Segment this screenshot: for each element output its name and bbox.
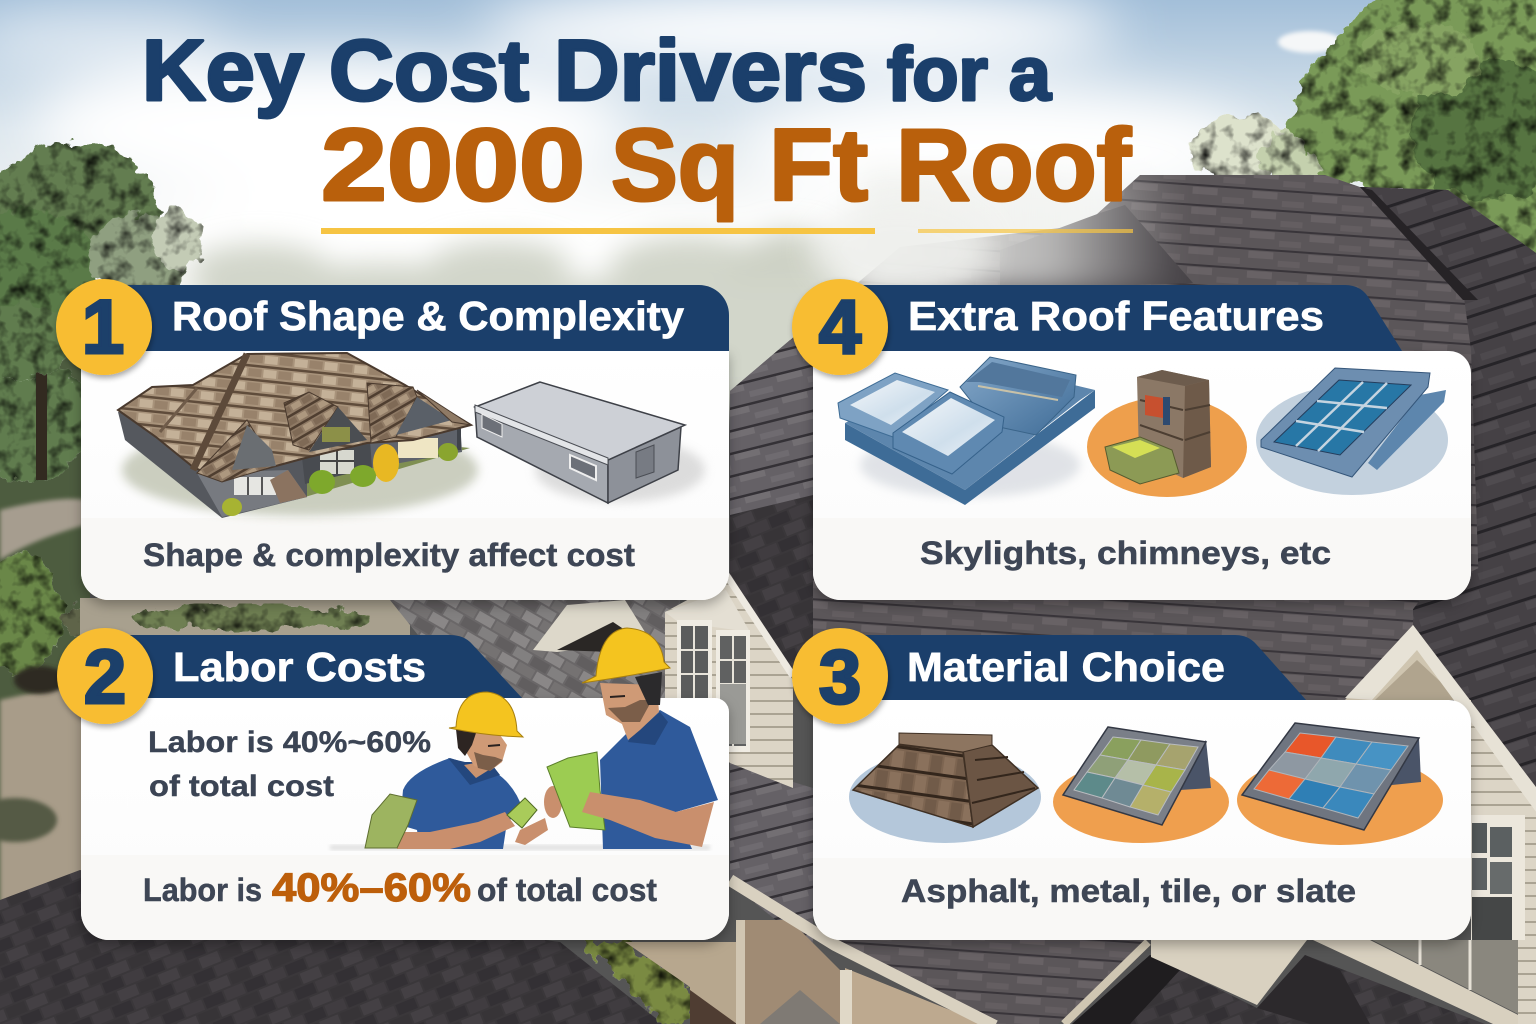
caption xyxy=(143,866,657,910)
caption: Labor is xyxy=(143,872,262,908)
heading: Labor Costs xyxy=(173,644,426,690)
right gable xyxy=(1345,625,1536,960)
header bar xyxy=(840,285,1402,351)
title line 2: Ft xyxy=(769,108,868,222)
shrubs by the wall xyxy=(579,942,690,1024)
background: sky and clouds xyxy=(0,0,1536,330)
caption: Shape & complexity affect cost xyxy=(143,537,635,573)
panel 4: extra roof features xyxy=(792,279,1471,600)
number badge 2 xyxy=(57,628,153,724)
lower walls xyxy=(625,942,745,1024)
card body xyxy=(81,350,729,600)
panel 2: labor costs xyxy=(57,628,729,940)
illustration: skylights xyxy=(838,357,1095,505)
worker left xyxy=(365,692,548,849)
number badge 3: 3 xyxy=(819,635,861,720)
background: garden on the left xyxy=(0,300,410,905)
number badge 4: 4 xyxy=(819,285,861,370)
title line 2: 2000 xyxy=(321,108,585,222)
background: house walls, gables and windows xyxy=(0,573,1536,1024)
title xyxy=(142,23,1133,234)
title line 2: Sq xyxy=(611,108,739,222)
title line 1: Cost xyxy=(329,23,529,119)
heading: Roof Shape & Complexity xyxy=(172,293,684,339)
middle siding and trim xyxy=(665,577,793,788)
header bar xyxy=(104,285,729,351)
illustration: simple flat-roof building xyxy=(475,382,705,503)
title line 1: Key xyxy=(142,23,304,119)
body text xyxy=(148,726,431,803)
illustration: tile xyxy=(1237,723,1443,845)
illustration: two workers with money xyxy=(330,628,718,850)
header bar xyxy=(840,635,1306,700)
heading: Material Choice xyxy=(907,644,1225,690)
heading: Extra Roof Features xyxy=(908,293,1324,339)
title underline xyxy=(321,228,1133,234)
small dormer xyxy=(533,600,650,652)
worker right xyxy=(544,628,718,849)
illustration: chimney and money xyxy=(1087,370,1247,497)
title line 2: Roof xyxy=(896,108,1132,222)
header bar xyxy=(105,635,522,698)
caption: Asphalt, metal, tile, or slate xyxy=(901,873,1356,909)
bottom left roof xyxy=(0,870,663,1024)
caption: of total cost xyxy=(477,872,657,908)
illustration: complex house xyxy=(118,353,478,518)
card body xyxy=(813,351,1471,600)
number badge 1 xyxy=(56,279,152,375)
title line 1: Drivers xyxy=(554,23,867,119)
title line 2 xyxy=(321,108,1132,222)
title line 1: for a xyxy=(887,32,1052,117)
body text: Labor is 40%~60% xyxy=(148,726,431,759)
number badge 4 xyxy=(792,279,888,375)
card body xyxy=(81,698,729,940)
body text: of total cost xyxy=(149,770,334,803)
background: tree on the left xyxy=(0,142,202,380)
panel 1: roof shape and complexity xyxy=(56,279,729,600)
illustration: solar panel xyxy=(1256,368,1448,495)
panel 3: material choice xyxy=(792,628,1471,940)
background: fog over the roofline xyxy=(810,170,1180,300)
number badge 2: 2 xyxy=(84,635,126,720)
illustration: asphalt shingles xyxy=(849,733,1041,843)
lower roofs xyxy=(835,940,1148,1024)
number badge 1: 1 xyxy=(82,285,124,370)
background: misty distant trees xyxy=(190,230,860,410)
card body xyxy=(813,700,1471,940)
number badge 3 xyxy=(792,628,888,724)
caption: 40%–60% xyxy=(272,866,471,910)
background: house roofs xyxy=(390,175,1536,950)
caption: Skylights, chimneys, etc xyxy=(920,535,1331,571)
background: trees top right xyxy=(1190,0,1536,270)
illustration: metal xyxy=(1053,727,1229,843)
title line 1 xyxy=(142,23,1052,119)
